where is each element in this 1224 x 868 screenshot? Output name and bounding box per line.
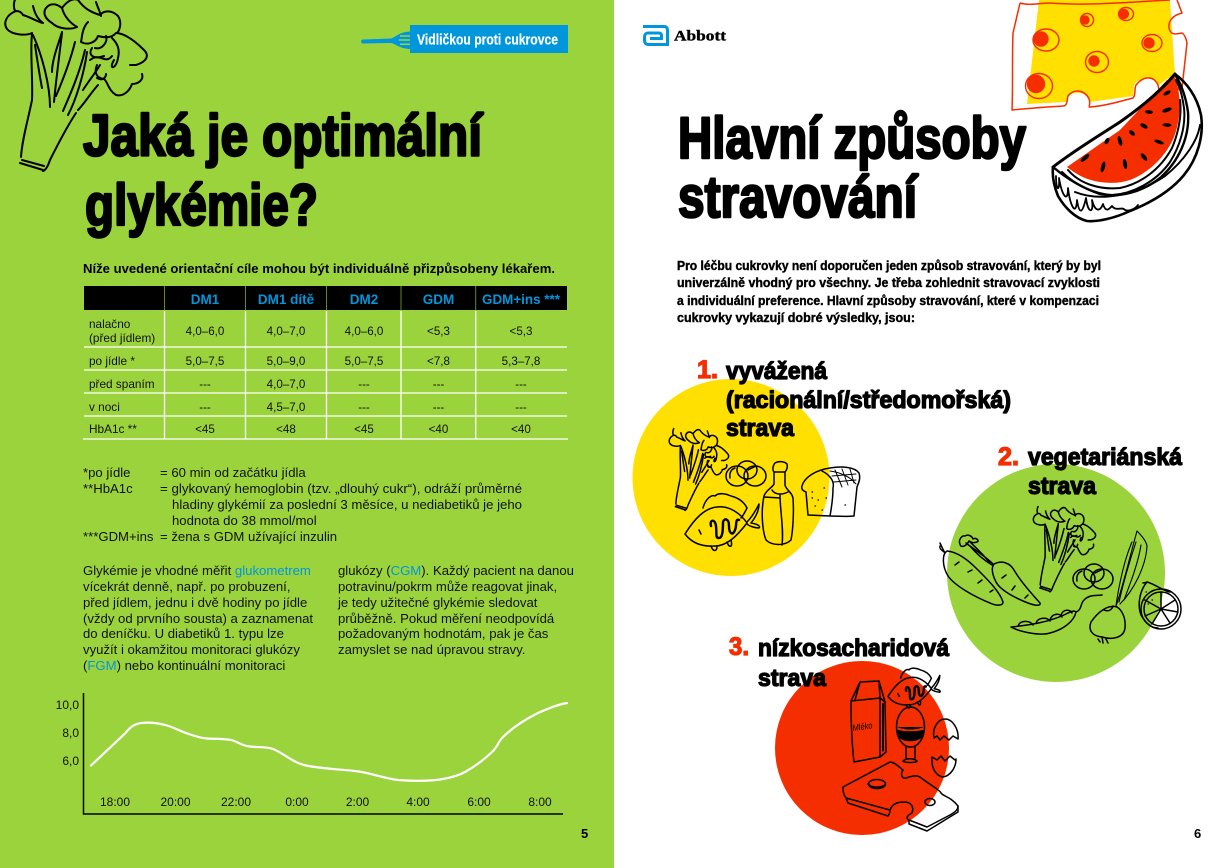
text block: right column: průběžně. Pokud měření neodpovídá [338, 611, 555, 626]
heading: 2. vegetarian diet: strava [1028, 473, 1097, 500]
table row: před spaním: --- [515, 378, 527, 391]
footnotes: ***GDM+ins [83, 529, 154, 544]
footnotes: = glykovaný hemoglobin (tzv. „dlouhý cukr“), odráží průměrné [160, 481, 522, 496]
heading: 3. low-carb diet: 3. [729, 633, 749, 661]
circle: red low-carb diet [775, 661, 949, 835]
icon: milk carton: Mléko [852, 720, 873, 733]
table header: DM2 [350, 292, 378, 307]
title: Jaká je optimální glykémie? [83, 104, 484, 238]
table row: v noci: --- [433, 401, 444, 414]
text block: left column: Glykémie je vhodné měřit glukometrem [83, 563, 311, 578]
chart x-axis labels: 2:00 [346, 795, 370, 809]
table row: HbA1c [89, 422, 531, 436]
table row: po jídle [89, 354, 540, 368]
logo: Abbott [643, 26, 726, 44]
table row: po jídle: 5,3–7,8 [502, 355, 540, 368]
table row: v noci: --- [515, 401, 527, 414]
table header: DM1 dítě [258, 292, 315, 307]
table row: po jídle: <7,8 [427, 355, 450, 368]
table row: nalačno: 4,0–6,0 [345, 325, 383, 338]
text block: right column: glukózy (CGM). Každý pacient na danou [338, 563, 574, 578]
table row: po jídle: 5,0–7,5 [186, 355, 224, 368]
section label: Vidličkou proti cukrovce [410, 25, 568, 53]
table row: po jídle: 5,0–7,5 [345, 355, 383, 368]
text block: right column: potravinu/pokrm může reagovat jinak, [338, 579, 557, 594]
table row: před spaním: 4,0–7,0 [267, 378, 305, 391]
text block: left column: před jídlem, jednu i dvě hodiny po jídle [83, 595, 307, 610]
footnotes: *po jídle [83, 465, 130, 480]
page number 5: 5 [581, 826, 588, 841]
heading: 3. low-carb diet: nízkosacharidová [758, 635, 950, 662]
title: Hlavní způsoby stravování: stravování [678, 165, 919, 230]
icon: eggs [726, 461, 766, 486]
icon: egg in egg cup [896, 707, 924, 762]
icon: broccoli [1033, 507, 1096, 592]
table row: nalačno: (před jídlem) [89, 331, 155, 345]
cheese holes [1026, 8, 1162, 98]
chart x-axis labels: 4:00 [406, 795, 430, 809]
title: Hlavní způsoby stravování [678, 106, 1026, 230]
table row: nalačno: nalačno [89, 317, 131, 331]
icon: beet [1090, 531, 1147, 643]
circle: yellow balanced diet [632, 379, 830, 576]
text block: left column: využít i okamžitou monitoraci glukózy [83, 642, 300, 657]
chart x-axis labels: 0:00 [285, 795, 309, 809]
text block: right column [337, 563, 574, 657]
heading: 1. balanced diet [697, 356, 1011, 442]
text block: right column: požadovaným hodnotám, pak je čas [338, 626, 549, 641]
heading: 2. vegetarian diet: vegetariánská [1028, 444, 1183, 471]
logo: Abbott: Abbott [674, 28, 726, 44]
footnotes [83, 465, 522, 544]
circle: green vegetarian diet [947, 464, 1165, 682]
heading: 2. vegetarian diet [998, 443, 1183, 500]
section label: Vidličkou proti cukrovce: Vidličkou proti cukrovce [417, 32, 558, 48]
icon: egg shell [932, 719, 958, 777]
table intro text: Níže uvedené orientační cíle mohou být individuálně přizpůsobeny lékařem. [83, 261, 555, 276]
icons: balanced diet foods [669, 429, 860, 550]
title: Jaká je optimální glykémie?: Jaká je optimální [83, 104, 484, 168]
chart y-axis labels: 8,0 [62, 726, 79, 740]
icon: carrots [940, 535, 1040, 605]
footnotes: **HbA1c [83, 481, 133, 496]
intro paragraph: univerzálně vhodný pro všechny. Je třeba zohlednit stravovací zvyklosti [677, 275, 1100, 290]
table row: v noci [89, 400, 527, 414]
heading: 1. balanced diet: vyvážená [726, 358, 828, 385]
table row: HbA1c: <40 [511, 423, 531, 436]
table row: v noci: 4,5–7,0 [267, 401, 305, 414]
text block: left column: (FGM) nebo kontinuální monitoraci [83, 658, 285, 673]
illustration: cheese [1012, 0, 1187, 110]
panel: right page [632, 0, 1202, 841]
text block: left column: do deníčku. U diabetiků 1. typu lze [83, 626, 284, 641]
icon: eggs [1073, 564, 1113, 589]
intro paragraph [677, 258, 1101, 325]
chart y-axis labels: 10,0 [56, 698, 79, 712]
table row: před spaním [89, 377, 527, 391]
page number 6: 6 [1194, 826, 1201, 841]
icon: fish [685, 494, 760, 550]
table row: před spaním: --- [358, 378, 370, 391]
icons: low-carb diet foods [843, 668, 958, 831]
table row: v noci: --- [199, 401, 211, 414]
chart x-axis labels: 22:00 [221, 795, 251, 809]
table row: nalačno: <5,3 [427, 325, 450, 338]
watermelon rind [1053, 74, 1202, 221]
table header: DM1 [191, 292, 220, 307]
chart x-axis labels: 18:00 [100, 795, 130, 809]
heading: 1. balanced diet: strava [726, 415, 795, 442]
table row: nalačno: 4,0–6,0 [186, 325, 224, 338]
icon: fork [361, 32, 411, 49]
chart y-axis labels [56, 698, 79, 768]
table row: nalačno: <5,3 [510, 325, 532, 338]
table row: po jídle: po jídle * [89, 354, 135, 368]
illustration: watermelon [1053, 74, 1202, 221]
text block: left column [83, 563, 313, 673]
table header: GDM+ins *** [482, 292, 561, 307]
icon: pea pod [1011, 595, 1102, 634]
icon: lime [1139, 582, 1181, 629]
table row: před spaním: --- [433, 378, 444, 391]
chart x-axis labels: 8:00 [528, 795, 552, 809]
table header [84, 286, 567, 310]
table row: po jídle: 5,0–9,0 [267, 355, 305, 368]
table row: HbA1c: HbA1c ** [89, 422, 137, 436]
table row: v noci: v noci [89, 400, 120, 414]
text block: left column: vícekrát denně, např. po probuzení, [83, 579, 290, 594]
chart x-axis labels: 6:00 [467, 795, 491, 809]
text block: left column: (vždy od prvního sousta) a zaznamenat [83, 611, 313, 626]
chart y-axis labels: 6,0 [62, 754, 79, 768]
chart curve [91, 703, 567, 781]
table: glycaemia targets [83, 286, 568, 439]
intro paragraph: cukrovky vykazují dobré výsledky, jsou: [677, 310, 915, 325]
watermelon seeds [1080, 89, 1172, 173]
text block: right column: zamyslet se nad úpravou stravy. [338, 642, 525, 657]
icons: vegetarian diet foods [940, 507, 1181, 643]
heading: 3. low-carb diet [729, 633, 950, 692]
icon: broccoli [669, 429, 729, 510]
icon: oil bottle [762, 462, 793, 545]
icon: milk carton [851, 681, 886, 762]
table header: GDM [423, 292, 454, 307]
footnotes: = žena s GDM užívající inzulin [160, 529, 337, 544]
table row: HbA1c: <48 [276, 423, 296, 436]
footnotes: hladiny glykémií za poslední 3 měsíce, u nediabetiků je jeho [172, 497, 522, 512]
table row: nalačno: 4,0–7,0 [267, 325, 305, 338]
icon: bread loaf [802, 467, 860, 516]
table row: před spaním: před spaním [89, 377, 155, 391]
line chart: glycaemia over 24 hours [56, 693, 567, 814]
icon: fish [888, 668, 940, 708]
footnotes: hodnota do 38 mmol/mol [172, 513, 317, 528]
icon: cheese wedge [843, 762, 958, 831]
heading: 3. low-carb diet: strava [758, 665, 827, 692]
heading: 1. balanced diet: 1. [697, 356, 718, 384]
table row: před spaním: --- [199, 378, 211, 391]
icon: broccoli illustration [5, 0, 147, 171]
table row: HbA1c: <45 [195, 423, 215, 436]
text block: right column: je tedy užitečné glykémie sledovat [337, 595, 538, 610]
intro paragraph: Pro léčbu cukrovky není doporučen jeden způsob stravování, který by byl [677, 258, 1101, 273]
heading: 2. vegetarian diet: 2. [998, 443, 1019, 471]
table row: HbA1c: <45 [354, 423, 374, 436]
table row: HbA1c: <40 [429, 423, 448, 436]
intro paragraph: a individuální preference. Hlavní způsoby stravování, které v kompenzaci [677, 293, 1099, 308]
title: Hlavní způsoby stravování: Hlavní způsoby [678, 106, 1026, 171]
footnotes: = 60 min od začátku jídla [160, 465, 306, 480]
panel: left green page [0, 0, 614, 868]
chart x-axis labels [100, 795, 552, 809]
chart x-axis labels: 20:00 [160, 795, 191, 809]
heading: 1. balanced diet: (racionální/středomořská) [726, 387, 1011, 414]
table row: v noci: --- [358, 401, 370, 414]
table row: nalačno [89, 317, 532, 345]
title: Jaká je optimální glykémie?: glykémie? [85, 173, 318, 238]
